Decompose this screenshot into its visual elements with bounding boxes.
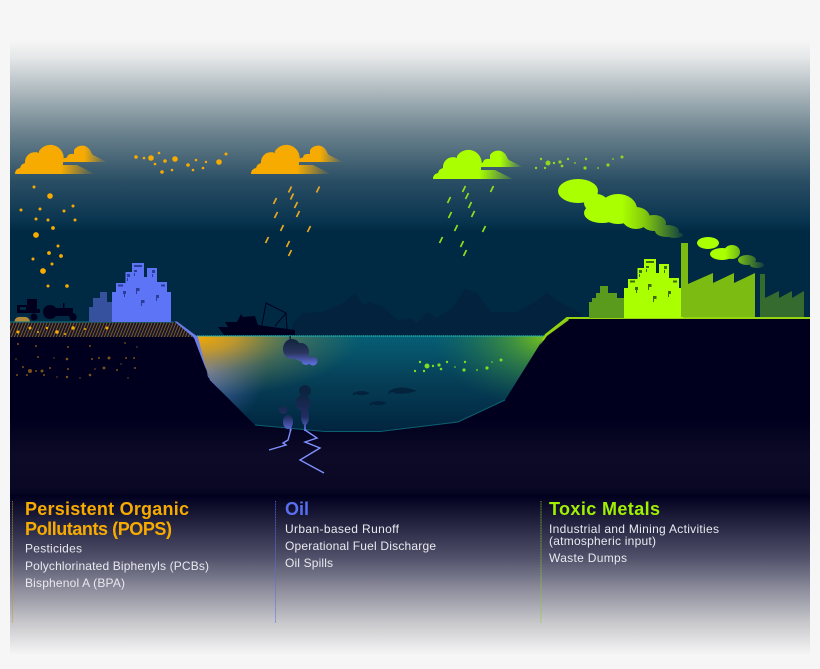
oil city back <box>89 292 112 322</box>
orange cloud 2 <box>251 145 343 174</box>
water body <box>195 336 545 432</box>
orange airborne dots <box>134 152 228 174</box>
small factory <box>760 274 804 317</box>
POPs heading: Pollutants (POPS) <box>25 519 172 539</box>
oil list <box>285 522 436 570</box>
POPs heading <box>25 499 189 539</box>
soil surface line <box>10 321 173 323</box>
POPs list: Pesticides <box>25 542 82 556</box>
POPs heading: Persistent Organic <box>25 499 189 519</box>
ground <box>10 318 810 500</box>
toxic metal dots in water <box>414 358 502 372</box>
oil slick plume <box>283 336 318 366</box>
oil city <box>112 263 171 322</box>
lake bed line <box>255 400 505 432</box>
green city back <box>589 286 624 318</box>
POPs column <box>12 499 209 623</box>
mountains <box>292 289 590 336</box>
falling orange dots <box>20 186 76 288</box>
fish <box>353 388 417 406</box>
green shoreline <box>543 318 810 340</box>
metals heading: Toxic Metals <box>549 499 660 519</box>
POPs list: Bisphenol A (BPA) <box>25 576 125 590</box>
POPs list: Polychlorinated Biphenyls (PCBs) <box>25 559 209 573</box>
large factory <box>681 243 755 317</box>
left bank slope <box>174 322 222 392</box>
oil heading: Oil <box>285 499 309 519</box>
seabed vent plumes <box>279 385 311 431</box>
fishing boat <box>218 303 295 335</box>
farm soil band <box>10 322 193 337</box>
green city <box>624 259 683 318</box>
green city windows <box>630 261 677 302</box>
green airborne dots <box>535 156 624 170</box>
surface pollutant dots <box>16 326 108 335</box>
large factory smoke <box>558 179 683 238</box>
footer fade <box>10 495 810 655</box>
underground pollutant dots <box>15 342 138 379</box>
orange cloud 1 <box>15 145 107 174</box>
POPs divider <box>12 501 14 623</box>
metals list: Industrial and Mining Activities <box>549 522 719 536</box>
oil column <box>276 499 436 623</box>
metals list <box>549 522 719 565</box>
tractor <box>14 299 77 322</box>
seabed cracks <box>269 429 324 473</box>
POPs tinted water <box>195 336 545 432</box>
lake <box>195 336 546 432</box>
metals list: Waste Dumps <box>549 551 627 565</box>
water surface <box>195 335 546 337</box>
oil-tinted slope <box>195 336 545 432</box>
oil divider <box>274 501 276 623</box>
right bank slope <box>540 317 569 345</box>
green rain <box>440 186 494 256</box>
sky background <box>10 40 810 440</box>
orange rain <box>266 186 320 256</box>
toxic metals column <box>541 499 719 623</box>
metal tinted water <box>195 336 545 432</box>
oil city windows <box>118 265 165 306</box>
small factory smoke <box>697 237 764 268</box>
oil list: Operational Fuel Discharge <box>285 539 436 553</box>
green cloud <box>433 150 523 179</box>
metals divider <box>540 501 542 623</box>
oil list: Urban-based Runoff <box>285 522 400 536</box>
POPs list <box>25 542 209 590</box>
metals list: (atmospheric input) <box>549 534 656 548</box>
oil list: Oil Spills <box>285 556 333 570</box>
